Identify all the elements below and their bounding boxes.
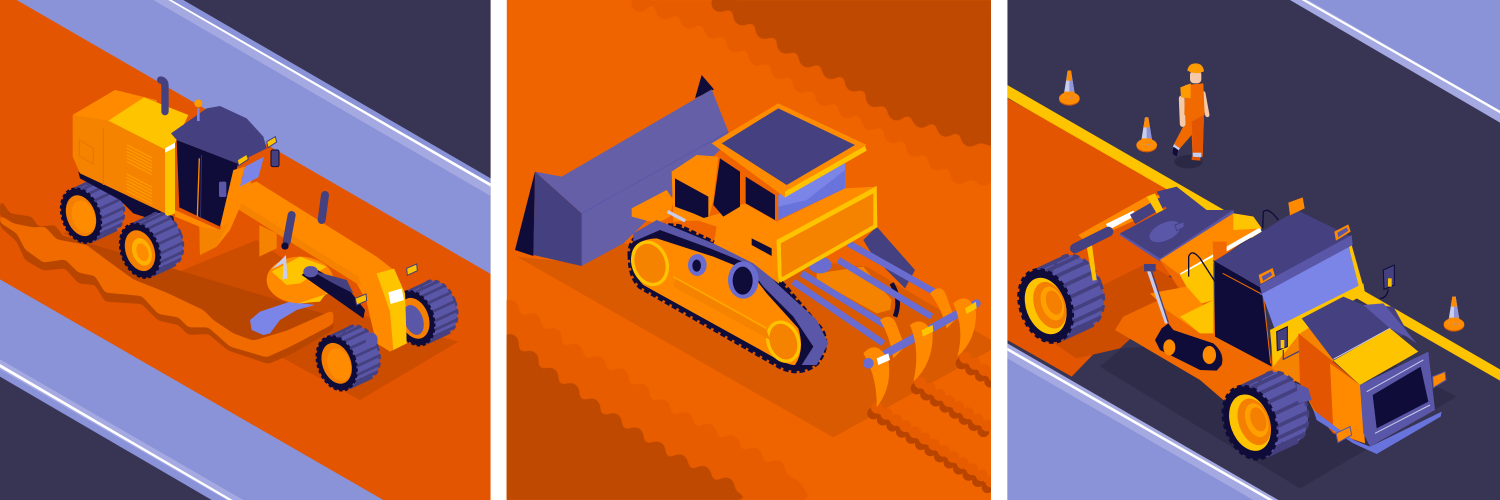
upper soil wave band, dark tone <box>715 0 997 147</box>
beacon lamp <box>194 99 202 121</box>
engine body <box>697 187 877 283</box>
dozer blade <box>515 75 728 266</box>
front wheel far <box>404 279 459 346</box>
upper soil wave band, mid tone <box>640 0 997 180</box>
machine shadow on ground <box>517 243 991 437</box>
front frame lights <box>355 264 417 305</box>
panel: motor grader on a dirt road <box>0 0 491 500</box>
lower roadside band <box>1007 343 1278 500</box>
radiator grille <box>1360 352 1435 447</box>
engine housing <box>73 90 188 217</box>
front wheel near <box>316 324 381 392</box>
rear wheel far <box>60 182 126 244</box>
prepared soil section <box>1007 98 1227 377</box>
rear deck <box>1120 187 1234 262</box>
roof lights and antenna <box>1259 197 1351 284</box>
ripper center axle <box>808 257 832 273</box>
circle drawbar <box>267 257 365 318</box>
exhaust stack <box>161 80 165 112</box>
lift arm yoke <box>1075 193 1163 281</box>
engine side plate <box>713 203 782 284</box>
steering knuckle <box>366 333 378 347</box>
right front wheel <box>1213 364 1318 467</box>
front axle housing <box>1297 383 1312 403</box>
body between cab and hood <box>1272 300 1333 433</box>
cab work lights and mirror <box>237 137 279 167</box>
left wheel <box>1009 248 1113 350</box>
front bumper <box>1313 410 1442 454</box>
cab <box>171 106 267 227</box>
panel: crawler with ripper on soil <box>500 0 997 500</box>
rear wheel near <box>118 212 184 279</box>
crawler track <box>627 220 828 371</box>
track idler wheels <box>627 237 673 289</box>
lower roadside: lavender band and dark asphalt <box>0 279 383 500</box>
road surface: orange soil <box>0 0 491 500</box>
soil background <box>507 0 991 500</box>
far track <box>817 227 915 317</box>
engine rear box <box>777 186 877 284</box>
hydraulic cylinder <box>1144 264 1168 323</box>
grab handle arc <box>1189 253 1215 282</box>
ripper link plate <box>1155 323 1222 371</box>
track rollers <box>688 254 707 276</box>
ripper bars <box>793 243 937 343</box>
upper roadside: lavender band and dark asphalt <box>17 0 491 274</box>
front hood section <box>632 155 718 223</box>
cab <box>1213 210 1365 367</box>
dark chassis under engine <box>78 172 175 227</box>
machine shadow on ground <box>63 213 458 400</box>
blade <box>250 302 315 335</box>
main frame arch <box>236 182 407 352</box>
cab <box>712 103 867 220</box>
hood lights <box>1336 372 1446 443</box>
side mirrors <box>1277 265 1394 359</box>
front steering stick far <box>322 195 325 220</box>
ripper furrow tracks <box>873 358 995 489</box>
traffic cone 3 <box>1444 297 1464 332</box>
panel: wheel loader on asphalt road <box>1007 0 1500 500</box>
front hood <box>1298 297 1418 443</box>
lower soil wave band, mid tone <box>500 302 812 500</box>
cab lower body <box>175 177 253 255</box>
frame leg over far wheel <box>370 269 407 350</box>
asphalt background <box>1007 0 1500 500</box>
ripper cross bar and teeth <box>863 288 977 407</box>
lower soil wave band, dark tone <box>500 335 753 500</box>
shadow on soil <box>1033 263 1187 358</box>
road worker <box>1173 63 1207 168</box>
steering stick with lever <box>272 215 292 279</box>
upper roadside band <box>1290 0 1500 123</box>
traffic cone 1 <box>1059 71 1080 106</box>
yellow edge line <box>1007 85 1500 381</box>
graded soil windrow <box>0 198 333 364</box>
center body <box>1115 213 1300 400</box>
traffic cone 2 <box>1136 117 1157 152</box>
shadow on asphalt <box>1100 333 1457 488</box>
engine vents <box>127 145 152 204</box>
